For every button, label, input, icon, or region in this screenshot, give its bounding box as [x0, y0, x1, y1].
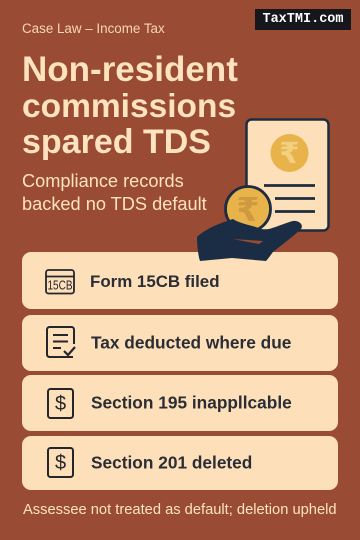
label: Section 201 deleted [91, 452, 252, 472]
icon: dollar document: $ [55, 452, 66, 474]
subtitle: backed no TDS default [22, 194, 207, 214]
icon: document [246, 120, 328, 230]
icon: form 15CB [45, 269, 75, 294]
title: commissions [22, 88, 236, 125]
illustration: document and coin in hand [197, 118, 330, 261]
label: Section 195 inappllcable [91, 392, 292, 412]
icon: document: ₹ [279, 136, 300, 170]
footer note: Assessee not treated as default; deletion upheld [23, 502, 337, 518]
panel: Form 15CB filed [22, 252, 338, 309]
watermark badge: TaxTMI.com [262, 12, 344, 27]
title: spared TDS [22, 123, 211, 161]
subtitle [22, 171, 207, 214]
label: Tax deducted where due [91, 332, 291, 352]
panel: Tax deducted where due [22, 315, 338, 371]
icon: checklist document [46, 326, 76, 358]
title: Non-resident [22, 50, 238, 89]
panel: Section 195 inapplicable [22, 375, 338, 431]
category label: Case Law – Income Tax [22, 21, 165, 36]
icon: dollar document: $ [55, 393, 66, 415]
icon: dollar document [47, 447, 74, 478]
watermark badge [255, 9, 351, 30]
title [22, 50, 238, 161]
icon: rupee coin: ₹ [237, 190, 259, 229]
icon: form 15CB: 15CB [48, 278, 72, 292]
subtitle: Compliance records [22, 171, 184, 191]
icon: rupee coin [226, 186, 270, 232]
panel: Section 201 deleted [22, 436, 338, 490]
icon: dollar document [47, 388, 74, 419]
label: Form 15CB filed [90, 272, 220, 290]
icon: hand [197, 219, 302, 261]
